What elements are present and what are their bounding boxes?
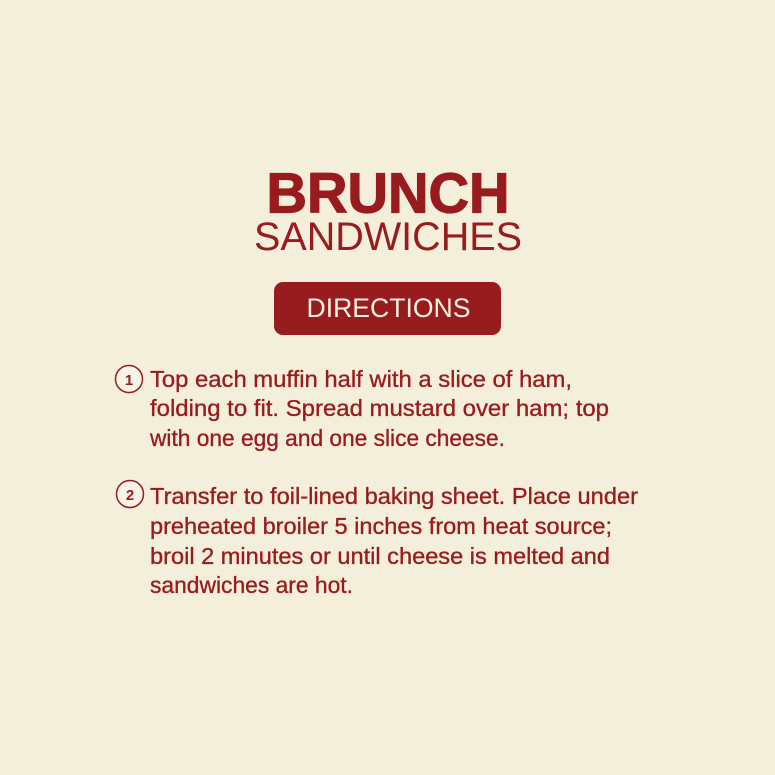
text: step 1 directions [149, 366, 609, 451]
icon: number 2 [116, 480, 144, 508]
step 1 [116, 366, 609, 451]
text: step 1 directions: folding to fit. Spread mustard over ham; top [150, 395, 609, 421]
title: BRUNCH: BRUNCH [266, 162, 510, 226]
text: step 2 directions: preheated broiler 5 inches from heat source; [150, 513, 612, 539]
icon: number 2: 2 [126, 487, 134, 504]
text: step 2 directions: broil 2 minutes or until cheese is melted and [150, 543, 610, 569]
text: step 1 directions: Top each muffin half with a slice of ham, [150, 366, 572, 392]
text: step 2 directions: sandwiches are hot. [150, 572, 353, 598]
directions badge: DIRECTIONS [306, 293, 470, 323]
icon: number 1 [116, 366, 142, 392]
step 2 [116, 480, 638, 598]
text: step 2 directions: Transfer to foil-lined baking sheet. Place under [150, 483, 638, 509]
text: step 1 directions: with one egg and one slice cheese. [149, 425, 505, 451]
directions badge [274, 282, 501, 335]
icon: number 1: 1 [125, 372, 133, 389]
title [254, 162, 522, 259]
title: SANDWICHES: SANDWICHES [254, 215, 522, 259]
text: step 2 directions [150, 483, 638, 598]
